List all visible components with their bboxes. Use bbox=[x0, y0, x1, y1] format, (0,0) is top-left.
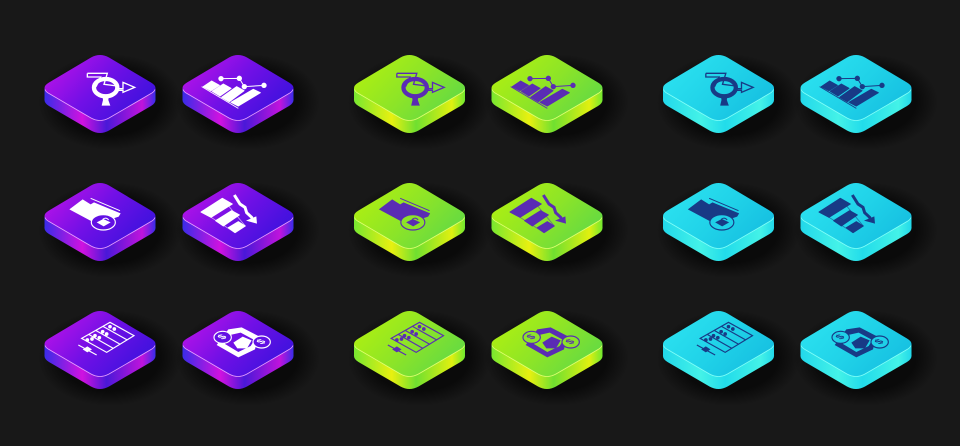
tile: green house with coins: $ bbox=[563, 338, 578, 346]
tile: cyan locked folder bbox=[656, 182, 800, 278]
tile: purple house with coins: $ bbox=[215, 333, 230, 341]
tile: cyan house with coins bbox=[794, 310, 938, 406]
tile: cyan server grid bbox=[656, 310, 800, 406]
tile: purple house with coins: $ bbox=[254, 338, 269, 346]
tile: cyan house with coins: $ bbox=[872, 338, 887, 346]
tile: purple locked folder bbox=[38, 182, 182, 278]
tile: cyan house with coins: $ bbox=[833, 333, 848, 341]
tile: cyan bar chart with line bbox=[794, 54, 938, 150]
tile: green house with coins bbox=[485, 310, 629, 406]
tile: purple server grid bbox=[38, 310, 182, 406]
tile: purple bar chart with line bbox=[176, 54, 320, 150]
tile: purple magnifier chart bbox=[38, 54, 182, 150]
tile: green magnifier chart bbox=[348, 54, 492, 150]
tile: green server grid bbox=[348, 310, 492, 406]
tile: green bar chart with line bbox=[485, 54, 629, 150]
tile: green house with coins: $ bbox=[524, 333, 539, 341]
tile: green locked folder bbox=[348, 182, 492, 278]
tile: green falling chart bbox=[485, 182, 629, 278]
tile: purple house with coins bbox=[176, 310, 320, 406]
tile: cyan falling chart bbox=[794, 182, 938, 278]
tile: purple falling chart bbox=[176, 182, 320, 278]
tile: cyan magnifier chart bbox=[656, 54, 800, 150]
